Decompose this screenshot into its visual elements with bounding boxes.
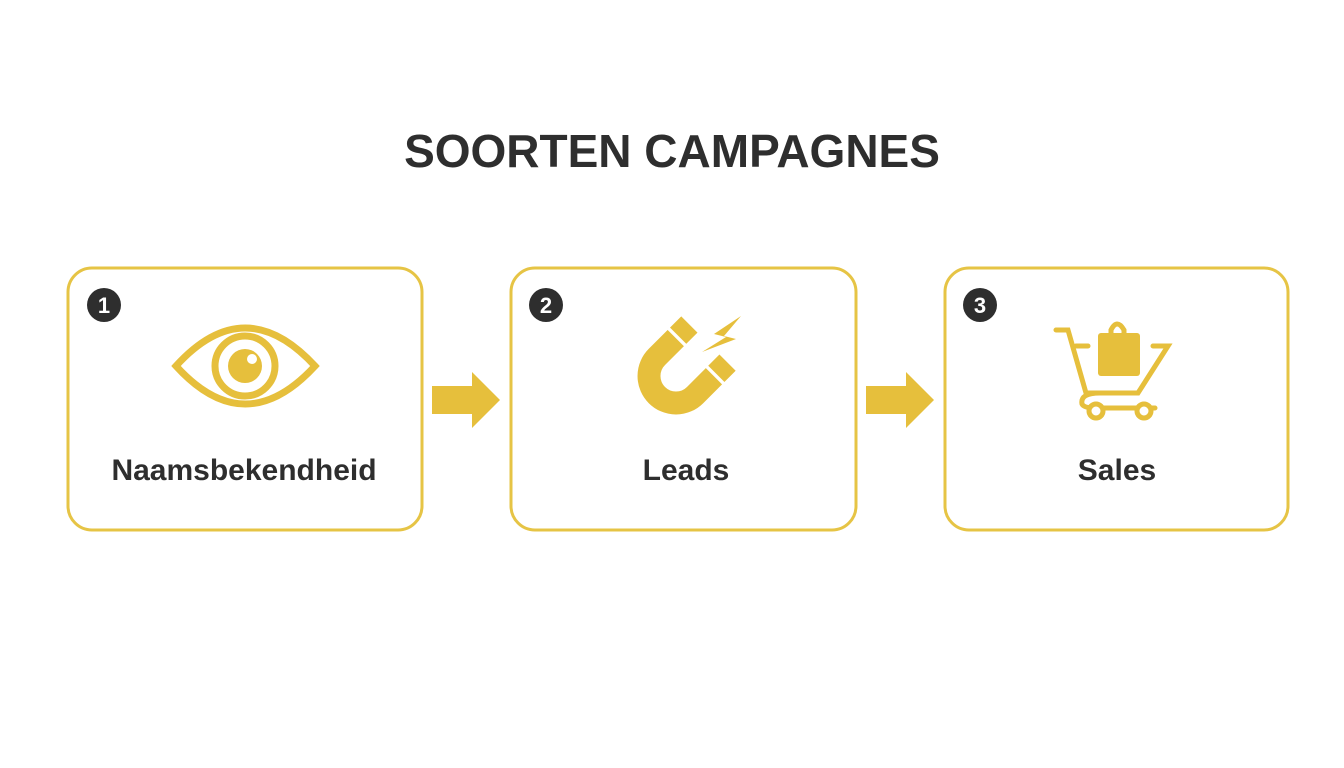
label: Sales (1078, 454, 1156, 487)
panel: naamsbekendheid (68, 268, 422, 530)
title: SOORTEN CAMPAGNES (404, 125, 940, 177)
icon: eye (176, 328, 315, 404)
arrow 2 (866, 372, 934, 428)
icon: cart with bag (1056, 324, 1168, 418)
icon: magnet (626, 313, 739, 426)
label: Leads (643, 454, 729, 487)
badge 2: 2 (540, 293, 552, 318)
label: Naamsbekendheid (111, 454, 377, 487)
panel: sales (945, 268, 1288, 530)
badge 1 (87, 288, 121, 322)
badge 3 (963, 288, 997, 322)
badge 1: 1 (98, 293, 110, 318)
arrow 1 (432, 372, 500, 428)
badge 3: 3 (974, 293, 986, 318)
panel: leads (511, 268, 856, 530)
icon: lightning (702, 316, 741, 352)
badge 2 (529, 288, 563, 322)
